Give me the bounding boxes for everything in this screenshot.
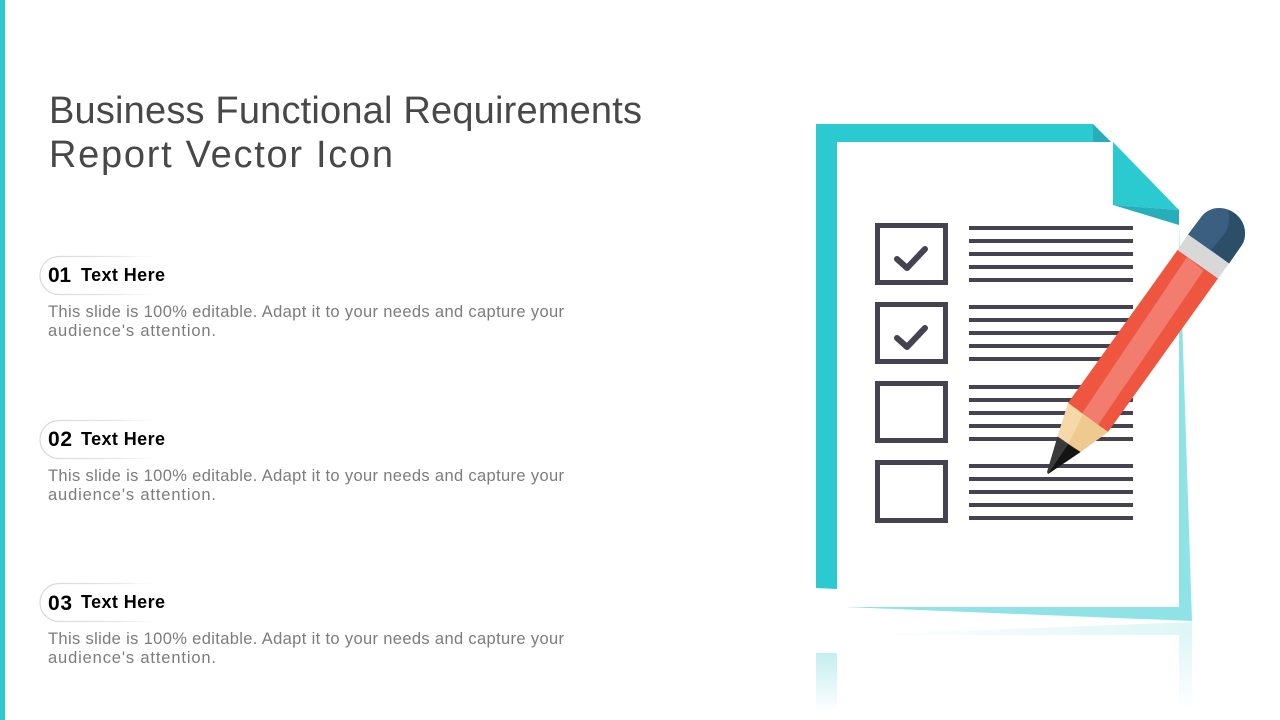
pill label 02 <box>40 420 155 458</box>
item 03 <box>40 584 564 667</box>
item 01: Text Here <box>81 265 165 285</box>
eraser <box>1188 208 1245 264</box>
item 03: Text Here <box>81 592 165 612</box>
light side edge <box>845 225 1192 621</box>
wood tip <box>1058 403 1108 452</box>
item 02: Text Here <box>81 429 165 449</box>
fold <box>1113 142 1179 225</box>
title: Business Functional Requirements <box>49 90 642 132</box>
item 01 <box>40 256 564 340</box>
item 01: This slide is 100% editable. Adapt it to your needs and capture your <box>48 303 564 321</box>
text lines <box>969 226 1133 520</box>
title <box>49 90 642 176</box>
item 02: audience's attention. <box>48 486 216 504</box>
document icon <box>816 124 1245 713</box>
pill label 01 <box>40 256 155 294</box>
reflection <box>816 622 1192 713</box>
item 03: 03 <box>48 592 72 615</box>
checkbox 3 <box>878 384 946 440</box>
accent bar <box>0 0 5 720</box>
item 03: This slide is 100% editable. Adapt it to your needs and capture your <box>48 630 564 648</box>
item 01: audience's attention. <box>48 322 216 340</box>
lead <box>1047 436 1080 474</box>
pill label 03 <box>40 584 155 622</box>
pencil <box>1047 208 1245 474</box>
checkbox 1 <box>878 226 946 282</box>
item 02: This slide is 100% editable. Adapt it to your needs and capture your <box>48 467 564 485</box>
title: Report Vector Icon <box>49 134 393 176</box>
item 01: 01 <box>48 264 71 287</box>
item 02: 02 <box>48 428 72 451</box>
checkbox 4 <box>878 462 946 520</box>
item 02 <box>40 420 564 504</box>
checkbox 2 <box>878 304 946 362</box>
pencil body <box>1068 250 1218 432</box>
item 03: audience's attention. <box>48 649 216 667</box>
document back sheet <box>816 124 1111 589</box>
ferrule <box>1178 234 1229 278</box>
